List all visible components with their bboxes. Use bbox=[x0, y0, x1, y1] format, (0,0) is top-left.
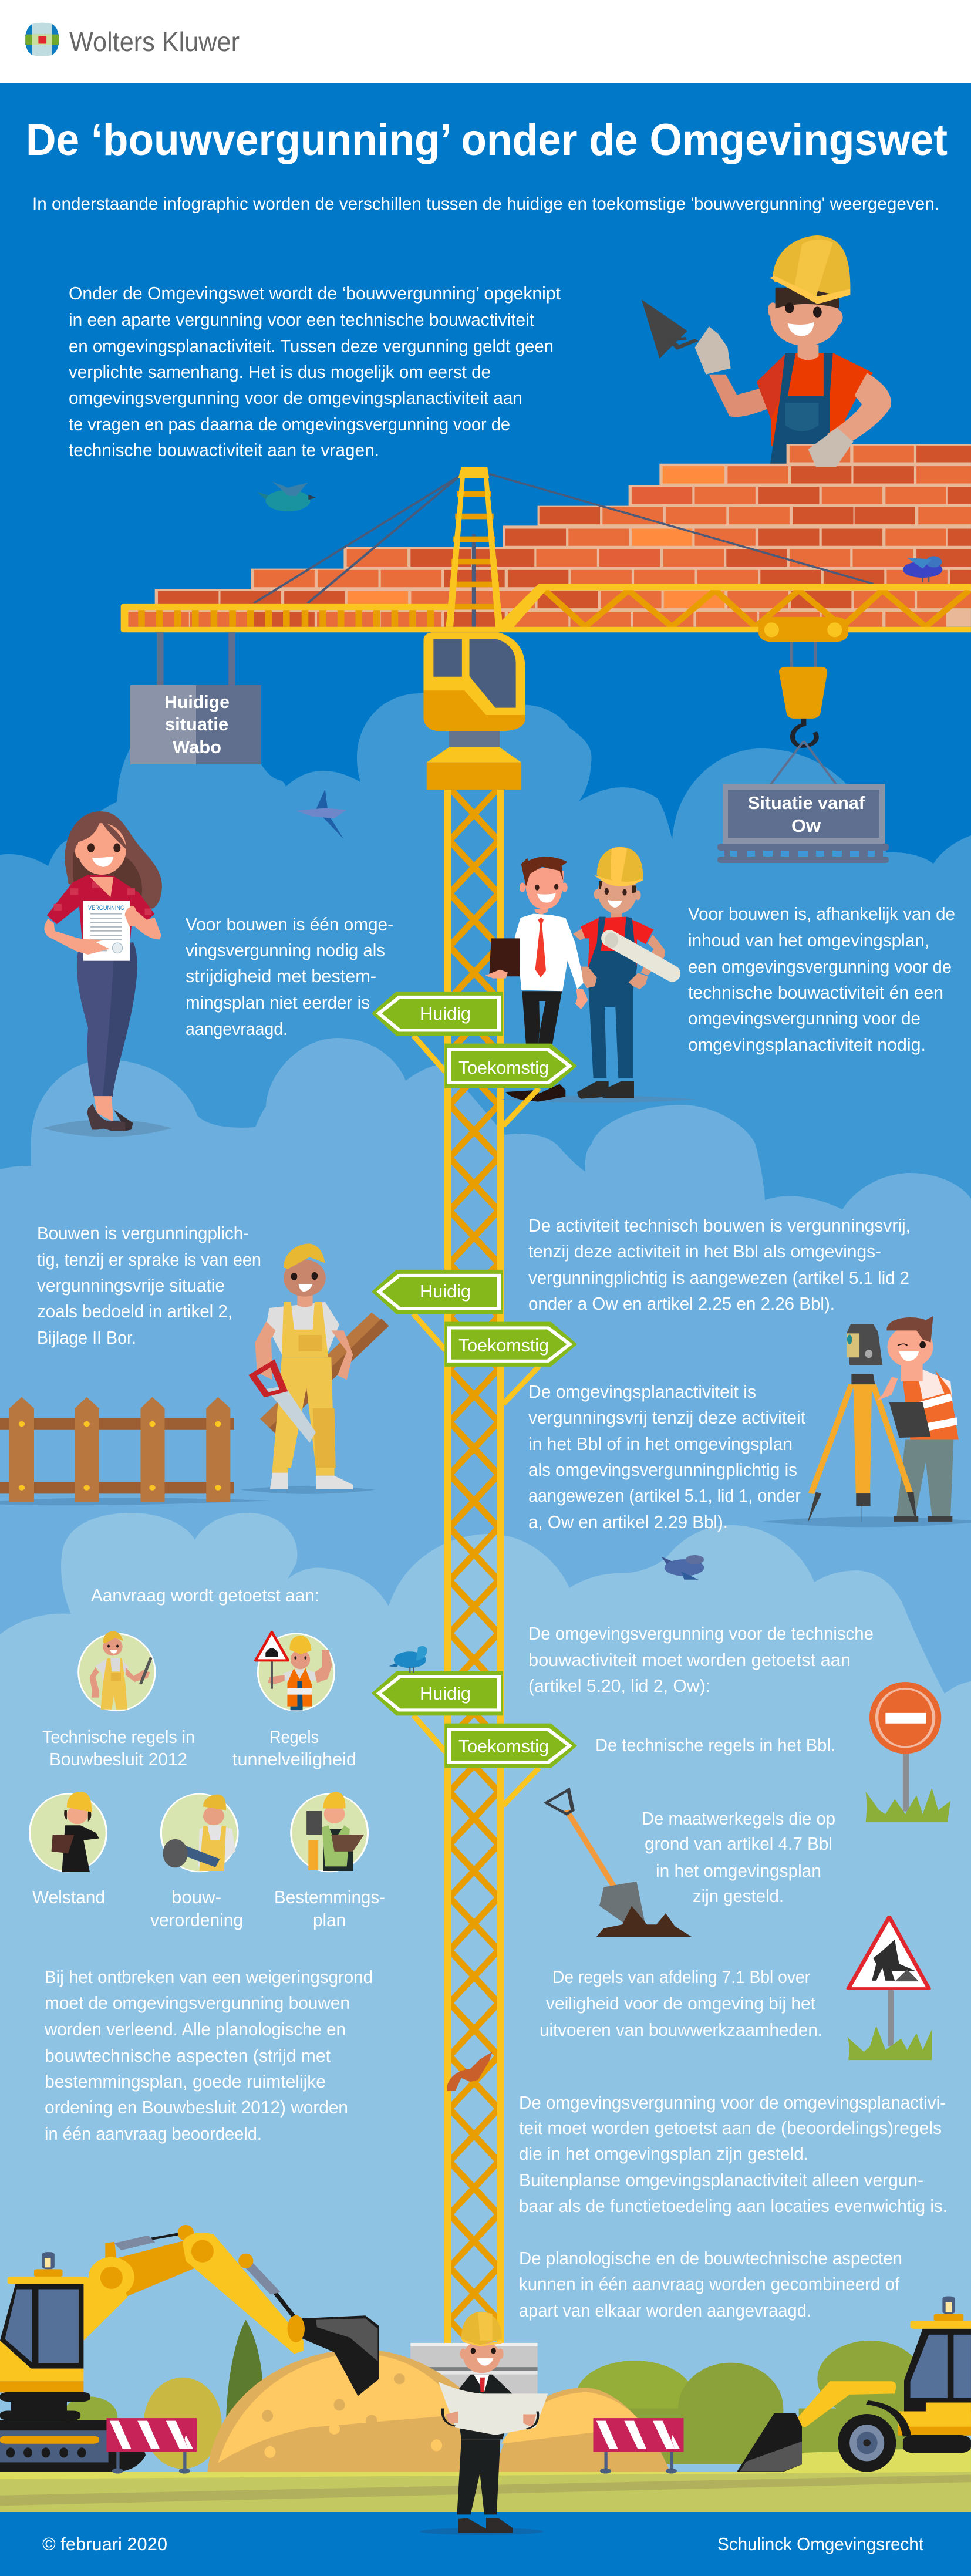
text block: technisch bouwen: onder a Ow en artikel 2.25 en 2.26 Bbl). bbox=[528, 1293, 835, 1314]
text: technische regels: De technische regels in het Bbl. bbox=[595, 1735, 835, 1755]
barrier left bbox=[106, 2418, 197, 2474]
text block: technisch bouwen: De activiteit technisch bouwen is vergunningsvrij, bbox=[528, 1215, 911, 1236]
text block: introductie: en omgevingsplanactiviteit. Tussen deze vergunning geldt geen bbox=[69, 336, 554, 356]
panel: hanging board Huidige situatie Wabo: situatie bbox=[165, 714, 228, 734]
signpost 3: Huidig / Toekomstig: Huidig bbox=[420, 1683, 471, 1704]
text block: woman: Voor bouwen is één omge- bbox=[186, 914, 393, 935]
text block: two men bbox=[688, 903, 955, 1055]
barrier right bbox=[593, 2418, 683, 2474]
icon: tunnel safety worker bbox=[255, 1632, 335, 1711]
text block: woman: strijdigheid met bestem- bbox=[186, 966, 376, 986]
labels under icons: plan bbox=[313, 1910, 346, 1930]
text block: vergunningplicht bbox=[37, 1223, 261, 1348]
text block: omgevingsplanactiviteit toets: Buitenplanse omgevingsplanactiviteit alleen vergun- bbox=[519, 2170, 923, 2190]
text block: technische toets intro: (artikel 5.20, lid 2, Ow): bbox=[528, 1675, 710, 1696]
illustration: bricklayer glove on wall bbox=[808, 428, 854, 467]
text block: maatwerkregels: De maatwerkegels die op bbox=[642, 1808, 835, 1829]
text block: vergunningplicht: Bouwen is vergunningplich- bbox=[37, 1223, 249, 1243]
panel: hanging board Huidige situatie Wabo: Huidige bbox=[164, 692, 230, 712]
labels under icons: Bouwbesluit 2012 bbox=[49, 1749, 187, 1769]
text block: veiligheid: De regels van afdeling 7.1 Bbl over bbox=[552, 1967, 810, 1987]
text block: vergunningplicht: vergunningsvrije situatie bbox=[37, 1275, 225, 1296]
labels under icons: bouw- bbox=[171, 1887, 221, 1907]
text block: technische toets intro: bouwactiviteit moet worden getoetst aan bbox=[528, 1650, 851, 1670]
illustration: brick wall bbox=[124, 444, 971, 627]
text block: combineren: apart van elkaar worden aangevraagd. bbox=[519, 2300, 811, 2321]
illustration: two men bbox=[486, 847, 697, 1103]
illustration: surveyor with tripod bbox=[761, 1316, 971, 1527]
suit man bbox=[486, 857, 588, 1102]
text block: omgevingsplanactiviteit: De omgevingsplanactiviteit is bbox=[528, 1381, 756, 1402]
text block: combineren: De planologische en de bouwtechnische aspecten bbox=[519, 2248, 902, 2268]
text block: introductie: technische bouwactiviteit aan te vragen. bbox=[69, 440, 379, 460]
footer: date: © februari 2020 bbox=[42, 2534, 167, 2554]
signpost 2: Huidig / Toekomstig: Huidig bbox=[420, 1281, 471, 1302]
panel: hanging board Huidige situatie Wabo bbox=[130, 685, 261, 764]
panel: hanging board Situatie vanaf Ow: Situatie vanaf bbox=[748, 793, 865, 813]
text block: woman: aangevraagd. bbox=[186, 1019, 288, 1039]
illustration: woman holding permit bbox=[42, 811, 172, 1137]
label on permit paper: VERGUNNING bbox=[88, 905, 124, 912]
text block: maatwerkregels: zijn gesteld. bbox=[693, 1886, 784, 1906]
crane bbox=[121, 467, 971, 2345]
intro line: In onderstaande infographic worden de verschillen tussen de huidige en toekomstige 'bouwvergunning' weergegeven. bbox=[32, 194, 939, 214]
text block: omgevingsplanactiviteit: aangewezen (artikel 5.1, lid 1, onder bbox=[528, 1485, 801, 1506]
text block: omgevingsplanactiviteit toets: De omgevingsvergunning voor de omgevingsplanactivi- bbox=[519, 2092, 946, 2113]
text block: omgevingsplanactiviteit toets: die in het omgevingsplan zijn gesteld. bbox=[519, 2143, 808, 2164]
icon group: circles with workers bbox=[30, 1631, 368, 1872]
text block: introductie: te vragen en pas daarna de omgevingsvergunning voor de bbox=[69, 414, 510, 434]
labels under icons bbox=[32, 1727, 385, 1930]
heading: Aanvraag wordt getoetst aan: Aanvraag wordt getoetst aan: bbox=[91, 1585, 319, 1606]
text block: omgevingsplanactiviteit: als omgevingsvergunningplichtig is bbox=[528, 1459, 797, 1480]
text block: weigeringsgrond: worden verleend. Alle planologische en bbox=[44, 2019, 346, 2039]
signpost 3: Huidig / Toekomstig bbox=[372, 1671, 577, 1806]
signpost 3: Huidig / Toekomstig: Toekomstig bbox=[458, 1736, 549, 1756]
icon: verordening worker bbox=[161, 1794, 238, 1872]
bottom row icons bbox=[30, 1792, 368, 1872]
top row icons bbox=[79, 1631, 335, 1711]
crane cab bbox=[423, 632, 525, 790]
signpost 1: Huidig / Toekomstig: Huidig bbox=[420, 1003, 471, 1024]
illustration: fence bbox=[0, 1397, 272, 1505]
text block: weigeringsgrond: in één aanvraag beoordeeld. bbox=[45, 2123, 262, 2144]
signpost 1: Huidig / Toekomstig: Toekomstig bbox=[458, 1057, 549, 1078]
signpost 2: Huidig / Toekomstig bbox=[372, 1270, 577, 1404]
text block: combineren: kunnen in één aanvraag worden gecombineerd of bbox=[519, 2274, 899, 2294]
sand piles bbox=[207, 2349, 670, 2472]
icon: bestemmingsplan worker bbox=[291, 1792, 368, 1872]
text block: weigeringsgrond: moet de omgevingsvergunning bouwen bbox=[45, 1992, 350, 2013]
ground bbox=[0, 2447, 971, 2514]
text block: vergunningplicht: zoals bedoeld in artikel 2, bbox=[37, 1301, 232, 1321]
text block: maatwerkregels: in het omgevingsplan bbox=[656, 1860, 821, 1881]
clouds: layered background bbox=[0, 692, 971, 2512]
text block: maatwerkregels: grond van artikel 4.7 Bbl bbox=[645, 1833, 832, 1854]
labels under icons: Technische regels in bbox=[42, 1727, 195, 1747]
text block: veiligheid: uitvoeren van bouwwerkzaamheden. bbox=[540, 2019, 822, 2040]
labels under icons: Bestemmings- bbox=[274, 1887, 385, 1907]
labels under icons: verordening bbox=[150, 1910, 243, 1930]
text block: omgevingsplanactiviteit toets: teit moet worden getoetst aan de (beoordelings)regels bbox=[519, 2118, 942, 2138]
illustration: man reading plan bbox=[420, 2312, 548, 2535]
icon: no entry sign bbox=[866, 1682, 950, 1822]
text block: weigeringsgrond bbox=[44, 1967, 373, 2144]
icon: welstand woman bbox=[30, 1792, 106, 1872]
text block: omgevingsplanactiviteit: in het Bbl of in het omgevingsplan bbox=[528, 1434, 793, 1454]
illustration: bricklayer (body) bbox=[642, 235, 891, 467]
labels under icons: Regels bbox=[269, 1727, 319, 1747]
panel: footer bar bbox=[0, 2512, 971, 2576]
text block: two men: technische bouwactiviteit én een bbox=[688, 982, 943, 1003]
text block: technisch bouwen bbox=[528, 1215, 911, 1314]
logo: Wolters Kluwer: Wolters Kluwer bbox=[69, 26, 240, 57]
text block: combineren bbox=[519, 2248, 902, 2321]
text block: omgevingsplanactiviteit toets: baar als de functietoedeling aan locaties evenwichtig is. bbox=[519, 2196, 948, 2216]
text block: maatwerkregels bbox=[642, 1808, 835, 1906]
crane lower mast bbox=[444, 790, 504, 2345]
text block: veiligheid: veiligheid voor de omgeving bij het bbox=[546, 1993, 815, 2014]
signpost 1: Huidig / Toekomstig bbox=[372, 992, 577, 1126]
text block: omgevingsplanactiviteit: a, Ow en artikel 2.29 Bbl). bbox=[528, 1512, 728, 1532]
logo: Wolters Kluwer bbox=[25, 23, 240, 57]
text block: omgevingsplanactiviteit toets bbox=[519, 2092, 948, 2216]
text block: weigeringsgrond: bouwtechnische aspecten (strijd met bbox=[45, 2045, 331, 2066]
text block: woman: mingsplan niet eerder is bbox=[186, 992, 370, 1013]
panel: hanging board Huidige situatie Wabo: Wabo bbox=[173, 737, 221, 757]
illustration: carpenter with plank and saw bbox=[240, 1243, 389, 1494]
icon: teal bird bbox=[257, 482, 316, 511]
icon: shovel in dirt bbox=[546, 1790, 692, 1937]
wheel loader bbox=[737, 2297, 971, 2472]
text block: technische toets intro bbox=[528, 1623, 874, 1696]
icon: squirrel on crane bbox=[447, 2052, 493, 2091]
text block: vergunningplicht: tig, tenzij er sprake is van een bbox=[37, 1249, 261, 1270]
icon: technical worker bbox=[79, 1631, 155, 1711]
text block: introductie: omgevingsvergunning voor de omgevingsplanactiviteit aan bbox=[69, 387, 522, 408]
text block: introductie: verplichte samenhang. Het is dus mogelijk om eerst de bbox=[69, 362, 491, 382]
text block: introductie: in een aparte vergunning voor een technische bouwactiviteit bbox=[69, 309, 534, 330]
text block: two men: een omgevingsvergunning voor de bbox=[688, 956, 952, 977]
labels under icons: Welstand bbox=[32, 1887, 105, 1907]
text block: introductie bbox=[69, 283, 561, 460]
icon: flying bird bbox=[296, 789, 347, 839]
text block: weigeringsgrond: Bij het ontbreken van een weigeringsgrond bbox=[45, 1967, 373, 1987]
text block: weigeringsgrond: bestemmingsplan, goede ruimtelijke bbox=[45, 2071, 326, 2092]
signpost 2: Huidig / Toekomstig: Toekomstig bbox=[458, 1335, 549, 1356]
icon: road works warning sign bbox=[847, 1917, 932, 2060]
scene: construction site at bottom bbox=[0, 2225, 971, 2514]
text block: woman: vingsvergunning nodig als bbox=[186, 940, 385, 960]
text block: omgevingsplanactiviteit: vergunningsvrij tenzij deze activiteit bbox=[528, 1407, 805, 1428]
trees and bushes bbox=[62, 2320, 923, 2469]
concrete base bbox=[410, 2343, 538, 2396]
worker with blueprint bbox=[573, 847, 672, 1099]
text block: two men: inhoud van het omgevingsplan, bbox=[688, 930, 929, 950]
icon: small bird bbox=[662, 1555, 704, 1580]
text block: omgevingsplanactiviteit bbox=[528, 1381, 805, 1532]
text block: weigeringsgrond: ordening en Bouwbesluit 2012) worden bbox=[45, 2097, 348, 2118]
labels under icons: tunnelveiligheid bbox=[232, 1749, 356, 1769]
text block: technisch bouwen: tenzij deze activiteit in het Bbl als omgevings- bbox=[528, 1241, 881, 1262]
footer: publisher: Schulinck Omgevingsrecht bbox=[717, 2534, 923, 2554]
panel: hanging board Situatie vanaf Ow bbox=[717, 784, 889, 863]
text block: introductie: Onder de Omgevingswet wordt de ‘bouwvergunning’ opgeknipt bbox=[69, 283, 561, 304]
icon: blue bird on sign bbox=[389, 1646, 427, 1673]
text block: two men: omgevingsvergunning voor de bbox=[688, 1008, 921, 1029]
excavator bbox=[0, 2225, 379, 2472]
panel: hanging board Situatie vanaf Ow: Ow bbox=[791, 815, 821, 836]
text block: vergunningplicht: Bijlage II Bor. bbox=[37, 1327, 136, 1348]
text block: two men: omgevingsplanactiviteit nodig. bbox=[688, 1034, 926, 1055]
text block: woman bbox=[186, 914, 393, 1039]
crane upper mast and jib bbox=[121, 467, 971, 784]
text block: technische toets intro: De omgevingsvergunning voor de technische bbox=[528, 1623, 874, 1644]
text block: technisch bouwen: vergunningplichtig is aangewezen (artikel 5.1 lid 2 bbox=[528, 1267, 909, 1288]
icon: blue bird on jib bbox=[903, 556, 942, 582]
text block: two men: Voor bouwen is, afhankelijk van de bbox=[688, 903, 955, 924]
text block: veiligheid bbox=[540, 1967, 822, 2040]
